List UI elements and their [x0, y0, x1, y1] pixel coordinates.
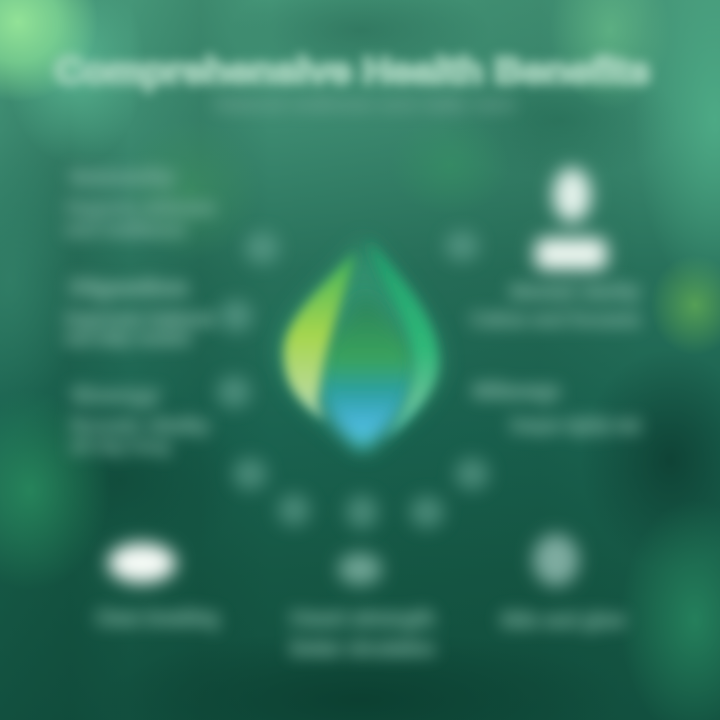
title: Comprehensive Health Benefits — [55, 50, 650, 91]
left text block 2 — [65, 275, 215, 348]
right text block 1: Calms and focuses — [470, 309, 640, 331]
subtitle: Natural wellness and daily care — [215, 95, 515, 114]
central drop icon — [280, 240, 440, 452]
right text block 2 — [472, 380, 640, 437]
left text block 2: Improves balance — [65, 309, 215, 330]
right leaf — [368, 240, 438, 438]
bottom left icon: cloud — [108, 543, 176, 583]
bottom center icon — [338, 553, 382, 585]
bottom center text: Better circulation — [290, 638, 435, 660]
left text block 3: Energy — [72, 384, 160, 407]
right text block 2: Deeper nightly rest — [510, 415, 640, 437]
small icon ring around drop — [217, 231, 489, 529]
left text block 1: and resilience — [65, 220, 185, 241]
bottom center text — [290, 608, 435, 660]
bottom right text: Skin and glow — [500, 609, 626, 632]
left text block 2: Digestion — [70, 275, 188, 300]
bottom left text: Clean breathing — [95, 607, 219, 630]
left text block 1: Supports defenses — [65, 198, 215, 219]
left text block 3: all day long — [70, 437, 170, 456]
right text block 1 — [470, 281, 641, 331]
right icon: person — [535, 168, 607, 270]
drop glow — [280, 240, 440, 452]
left text block 3: Boosts vitality — [70, 416, 211, 437]
bottom right icon — [533, 534, 579, 586]
right text block 1: Mental clarity — [510, 281, 641, 303]
left text block 3 — [70, 384, 211, 456]
left text block 1: Immunity — [70, 164, 176, 189]
left text block 1 — [65, 164, 215, 241]
drop core — [318, 295, 416, 450]
bottom center text: Heart strength — [290, 608, 435, 630]
left leaf — [284, 252, 355, 420]
right text block 2: Sleep — [472, 380, 560, 403]
left text block 2: and daily comfort — [65, 329, 190, 348]
